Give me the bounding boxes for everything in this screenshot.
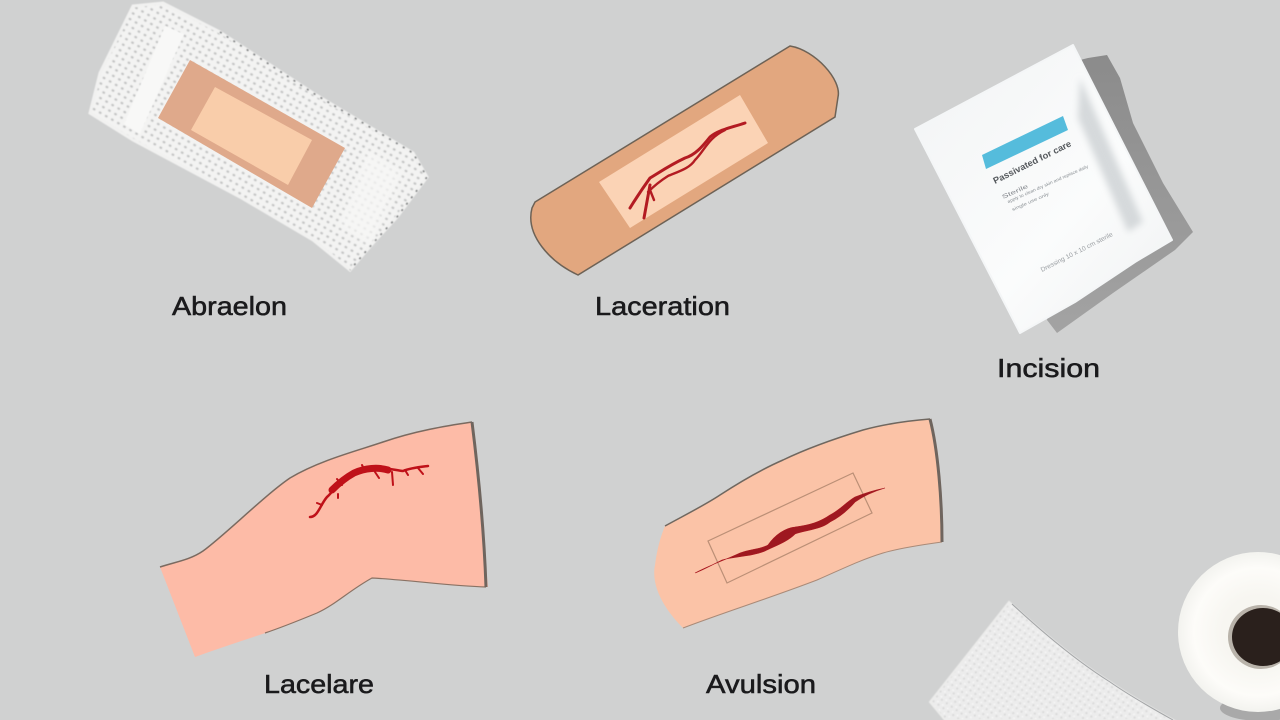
incision frame	[708, 473, 872, 583]
panel: laceration bandage	[531, 46, 838, 275]
small print body line 1: apply to clean dry skin and replace daily	[1007, 163, 1090, 204]
roll core rim	[1228, 605, 1280, 669]
packet footer text: Dressing 10 x 10 cm sterile	[1040, 231, 1115, 274]
jagged wound	[310, 465, 428, 517]
small print heading: Sterile	[1001, 184, 1030, 201]
inner pad	[191, 87, 312, 185]
small print body line 2: single use only	[1011, 191, 1051, 212]
limb edge shadow	[472, 422, 486, 587]
panel: limb with jagged wound	[160, 422, 488, 657]
roll core hole	[1232, 608, 1280, 666]
adhesive pad	[158, 60, 345, 208]
roll shadow	[1220, 695, 1280, 720]
roll body	[1178, 552, 1280, 712]
limb outline	[665, 419, 930, 526]
gauze roll	[1178, 552, 1280, 720]
label: incision: Incision	[997, 353, 1100, 383]
bandage pad	[599, 95, 768, 228]
gauze band	[124, 26, 184, 134]
panel: abrasion gauze dressing	[90, 3, 427, 270]
label: laceration: Laceration	[595, 291, 730, 321]
label: lacerated limb: Lacelare	[264, 669, 374, 699]
limb edge shadow	[930, 419, 942, 542]
packet side crease	[1078, 78, 1143, 232]
packet small print	[1001, 158, 1093, 214]
bandage strip	[531, 46, 838, 275]
limb outline	[160, 422, 472, 567]
label: abrasion: Abraelon	[172, 291, 287, 321]
packet heading: Passivated for care	[991, 138, 1073, 186]
limb lower outline	[265, 578, 486, 633]
wound	[630, 123, 745, 218]
limb skin	[654, 419, 942, 628]
frayed gauze edge	[220, 32, 427, 270]
panel: incision sterile packet	[915, 45, 1193, 333]
wound	[695, 488, 885, 573]
panel: limb with avulsion	[654, 419, 942, 628]
blue label	[982, 116, 1068, 169]
packet shadow	[1047, 55, 1193, 333]
gauze sheet edge	[1012, 604, 1173, 720]
gauze mesh	[90, 3, 427, 270]
packet body	[915, 45, 1172, 333]
gauze sheet weave	[930, 602, 1173, 720]
gauze end band	[340, 150, 402, 245]
label: avulsion: Avulsion	[706, 669, 816, 699]
limb skin	[160, 422, 488, 657]
folded gauze sheet	[930, 602, 1173, 720]
limb lower outline	[683, 542, 942, 628]
